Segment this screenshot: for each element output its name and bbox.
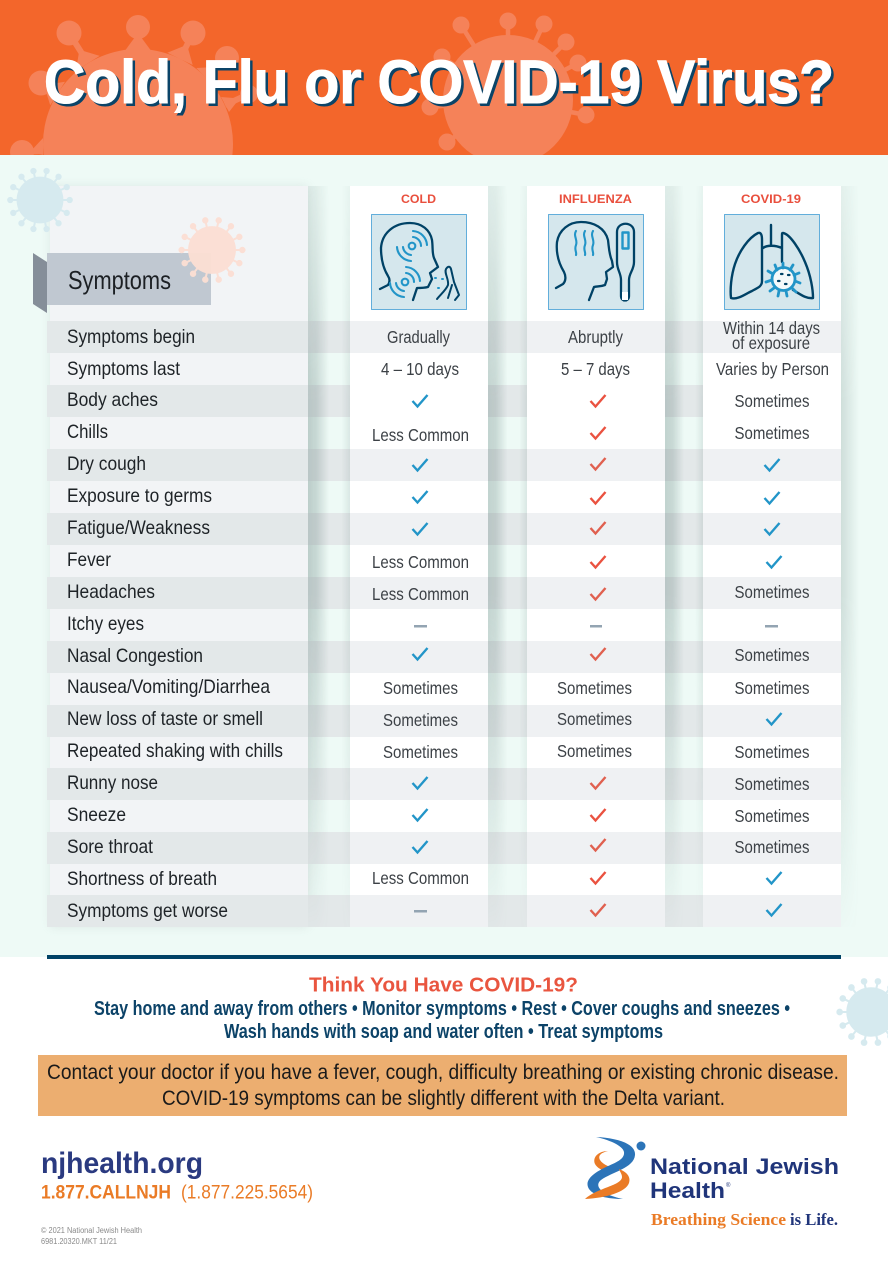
advice heading: Think You Have COVID-19? <box>309 974 578 996</box>
copyright: 6981.20320.MKT 11/21 <box>41 1237 117 1246</box>
phone numbers: (1.877.225.5654) <box>181 1182 313 1204</box>
row: sneeze: Sneeze <box>67 804 126 826</box>
row: new loss of taste or smell: Sometimes <box>557 709 632 729</box>
row: nasal congestion <box>67 645 810 667</box>
row: runny nose <box>67 772 810 794</box>
row: symptoms last: 5 – 7 days <box>561 359 630 379</box>
row: exposure to germs <box>67 485 780 507</box>
virus decoration: blue bottom-right <box>837 979 888 1045</box>
logo tagline: is Life. <box>790 1210 838 1229</box>
logo: national jewish health <box>585 1137 839 1229</box>
row: runny nose: Sometimes <box>734 774 810 794</box>
row: itchy eyes: Itchy eyes <box>67 613 144 635</box>
row: exposure to germs: Exposure to germs <box>67 485 212 507</box>
row: sneeze <box>67 804 810 826</box>
row: symptoms begin: Within 14 days <box>723 318 820 338</box>
logo tagline: Breathing Science <box>651 1210 786 1229</box>
logo wordmark: ® <box>726 1182 731 1189</box>
row: nausea/vomiting/diarrhea: Sometimes <box>383 678 458 698</box>
row: symptoms begin: Gradually <box>387 327 450 347</box>
row: nasal congestion: Sometimes <box>734 645 810 665</box>
row: headaches: Headaches <box>67 581 155 603</box>
row: repeated shaking with chills <box>67 740 810 762</box>
row: chills <box>67 421 810 445</box>
row: symptoms last: 4 – 10 days <box>381 359 459 379</box>
panel: covid-19 column <box>703 186 841 927</box>
row: fatigue/weakness: Fatigue/Weakness <box>67 517 210 539</box>
row: new loss of taste or smell: Sometimes <box>383 710 458 730</box>
title: Cold, Flu or COVID-19 Virus? <box>44 48 834 116</box>
row: nasal congestion: Nasal Congestion <box>67 645 203 667</box>
row: headaches <box>67 581 810 604</box>
shaded row bands <box>47 321 841 927</box>
row: repeated shaking with chills: Sometimes <box>383 742 458 762</box>
row: fever: Fever <box>67 549 111 571</box>
advice text <box>94 998 790 1043</box>
row: repeated shaking with chills: Sometimes <box>734 742 810 762</box>
row: headaches: Sometimes <box>734 582 810 602</box>
logo tagline <box>651 1210 838 1229</box>
row: nausea/vomiting/diarrhea: Sometimes <box>557 678 632 698</box>
column gap shadows <box>308 186 859 927</box>
panel: symptoms column background <box>50 186 308 927</box>
callout: contact your doctor <box>38 1055 847 1116</box>
virus silhouette: right <box>422 12 594 165</box>
copyright: © 2021 National Jewish Health <box>41 1226 142 1235</box>
row: symptoms begin <box>67 318 820 353</box>
title: Cold, Flu or COVID-19 Virus? <box>46 50 836 118</box>
row: symptoms begin: Abruptly <box>568 327 623 347</box>
row: new loss of taste or smell: New loss of taste or smell <box>67 708 263 730</box>
row: nausea/vomiting/diarrhea: Nausea/Vomiting/Diarrhea <box>67 676 270 698</box>
row: new loss of taste or smell <box>67 708 782 730</box>
row: body aches: Sometimes <box>734 391 810 411</box>
website: njhealth.org <box>41 1147 203 1180</box>
row: shortness of breath <box>67 868 782 890</box>
virus silhouette: left <box>10 15 258 239</box>
virus decoration: blue top-left <box>8 168 72 232</box>
logo wordmark <box>650 1154 839 1203</box>
row: shortness of breath: Less Common <box>372 868 469 888</box>
icon: head with cough waves <box>372 214 466 310</box>
symptoms heading tag: Symptoms <box>68 265 171 295</box>
copyright <box>41 1226 142 1246</box>
phone numbers <box>41 1182 313 1204</box>
row: chills: Sometimes <box>734 423 810 443</box>
row: symptoms get worse <box>67 900 782 922</box>
virus decoration: peach <box>179 218 245 282</box>
column heading: covid-19: COVID-19 <box>741 194 801 206</box>
logo mark: helix <box>585 1137 646 1199</box>
row: fever: Less Common <box>372 552 469 572</box>
row: symptoms last: Symptoms last <box>67 358 181 380</box>
row: repeated shaking with chills: Repeated shaking with chills <box>67 740 283 762</box>
row: nausea/vomiting/diarrhea: Sometimes <box>734 678 810 698</box>
row: dry cough <box>67 453 780 475</box>
symptoms heading tag <box>33 253 211 313</box>
advice text: Wash hands with soap and water often • Treat symptoms <box>224 1021 663 1043</box>
icon: head with thermometer <box>548 214 644 310</box>
logo wordmark: National Jewish <box>650 1154 839 1179</box>
row: dry cough: Dry cough <box>67 453 146 475</box>
header band <box>0 0 888 239</box>
row: sore throat: Sore throat <box>67 836 154 858</box>
icon: lungs with virus <box>724 214 820 310</box>
mint background panel <box>0 155 888 957</box>
row: repeated shaking with chills: Sometimes <box>557 741 632 761</box>
row: symptoms begin: of exposure <box>732 333 810 353</box>
column heading: cold: COLD <box>401 194 436 206</box>
panel: influenza column <box>527 186 665 927</box>
row: symptoms last: Varies by Person <box>716 359 829 379</box>
row: shortness of breath: Shortness of breath <box>67 868 217 890</box>
row: symptoms begin: Symptoms begin <box>67 326 195 348</box>
row: sore throat <box>67 836 810 858</box>
phone numbers: 1.877.CALLNJH <box>41 1182 171 1204</box>
row: symptoms get worse: Symptoms get worse <box>67 900 228 922</box>
divider bar <box>47 955 841 959</box>
logo wordmark: Health <box>650 1178 725 1203</box>
row: runny nose: Runny nose <box>67 772 158 794</box>
row: body aches: Body aches <box>67 389 158 411</box>
row: body aches <box>67 389 810 411</box>
row: symptoms last <box>67 358 829 380</box>
row: fatigue/weakness <box>67 517 780 539</box>
row: sore throat: Sometimes <box>734 837 810 857</box>
callout: contact your doctor: COVID-19 symptoms can be slightly different with the Delta variant. <box>162 1087 725 1110</box>
panel: cold column <box>350 186 488 927</box>
row: chills: Chills <box>67 421 108 443</box>
row: headaches: Less Common <box>372 584 469 604</box>
row: sneeze: Sometimes <box>734 806 810 826</box>
row: fever <box>67 549 782 572</box>
row: chills: Less Common <box>372 425 469 445</box>
column heading: influenza: INFLUENZA <box>559 194 632 206</box>
row: nausea/vomiting/diarrhea <box>67 676 810 698</box>
